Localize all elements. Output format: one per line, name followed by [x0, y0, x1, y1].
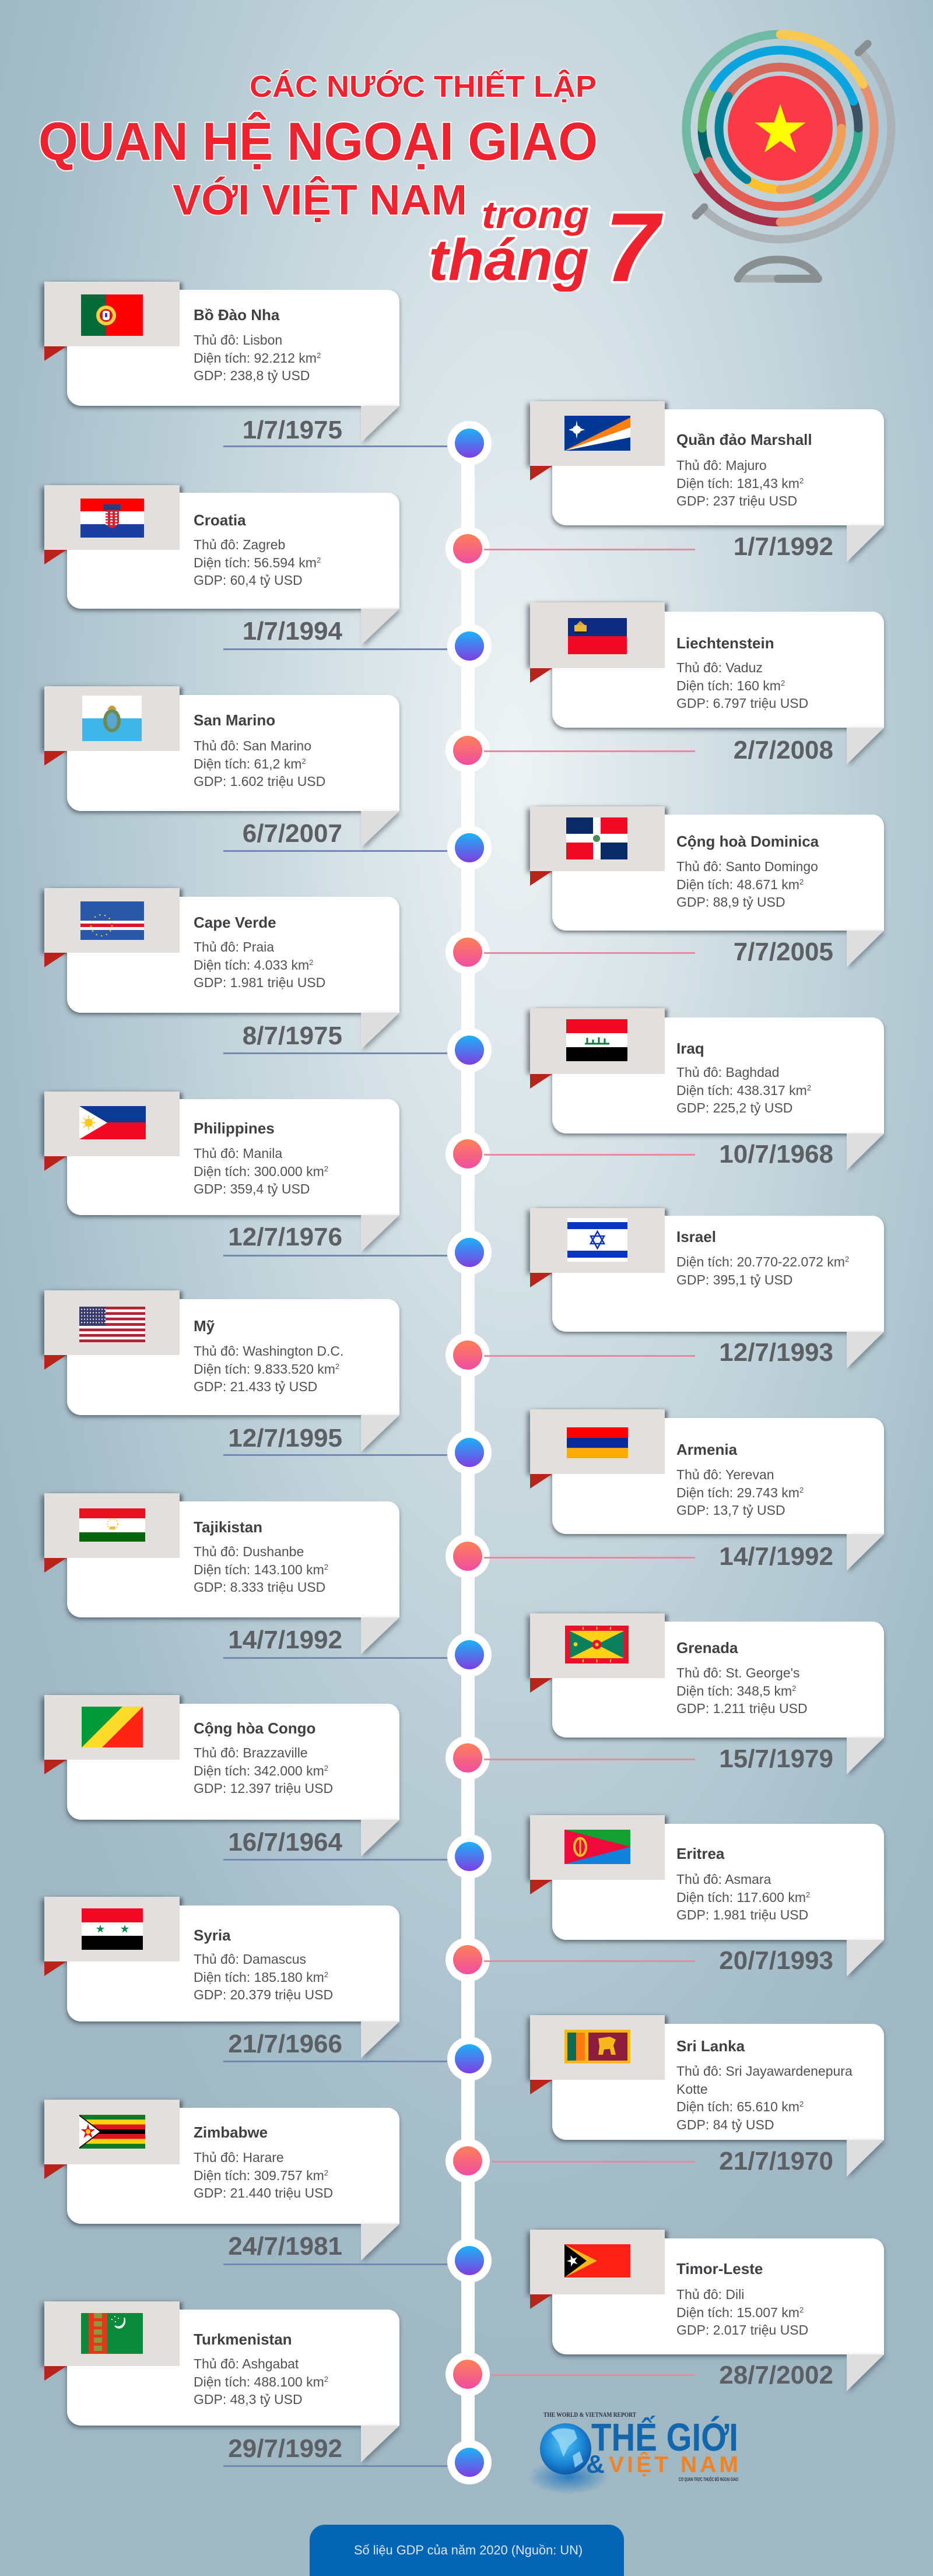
details: GDP: 238,8 tỷ USD — [194, 368, 310, 383]
details: Thủ đô: Lisbon — [194, 332, 282, 348]
flag: Armenia — [567, 1427, 628, 1458]
details: GDP: 88,9 tỷ USD — [676, 894, 785, 910]
details: GDP: 2.017 triệu USD — [676, 2322, 808, 2338]
connector — [492, 2374, 695, 2376]
logo: Thế Giới & Việt Nam: & — [586, 2450, 605, 2479]
details: Diện tích: 160 km2 — [676, 678, 785, 693]
dot: 21/7/1966 — [447, 2037, 492, 2081]
connector — [223, 2465, 447, 2467]
flag: Philippines — [79, 1106, 146, 1139]
date: 21/7/1966 — [228, 2030, 342, 2058]
dot: 15/7/1979 — [446, 1736, 490, 1780]
details: Diện tích: 309.757 km2 — [194, 2168, 328, 2183]
details: GDP: 1.981 triệu USD — [676, 1907, 808, 1922]
flag: San Marino — [82, 696, 142, 741]
card: Tajikistan — [38, 1491, 447, 1659]
details: GDP: 12.397 triệu USD — [194, 1781, 333, 1796]
country name: Tajikistan — [194, 1518, 262, 1536]
details: Thủ đô: Praia — [194, 939, 274, 954]
card: Eritrea — [482, 1815, 884, 1976]
country name: San Marino — [194, 711, 275, 729]
details: GDP: 1.602 triệu USD — [194, 774, 325, 789]
country name: Syria — [194, 1926, 231, 1944]
card: Bồ Đào Nha — [38, 280, 447, 447]
flag: Tajikistan — [79, 1508, 145, 1542]
connector — [223, 1657, 447, 1659]
details — [194, 1950, 333, 2003]
connector — [484, 1154, 695, 1156]
flag: United States — [79, 1307, 145, 1342]
country name: Zimbabwe — [194, 2124, 268, 2141]
country name: Turkmenistan — [194, 2331, 292, 2348]
flag: Sri Lanka — [564, 2030, 630, 2063]
flag: Israel — [567, 1218, 627, 1262]
details: Thủ đô: Majuro — [676, 458, 767, 473]
date: 7/7/2005 — [734, 938, 833, 966]
icon: globe with Vietnam flag — [682, 30, 896, 283]
connector — [492, 2161, 695, 2163]
flag: Syria — [82, 1908, 143, 1950]
card: Syria — [44, 1897, 447, 2062]
details: GDP: 8.333 triệu USD — [194, 1580, 325, 1595]
card: Iraq — [484, 1006, 887, 1172]
dot: 29/7/1992 — [447, 2440, 492, 2484]
flag: Croatia — [80, 499, 144, 538]
details — [194, 1342, 343, 1396]
flag: Grenada — [565, 1626, 629, 1663]
details — [194, 332, 321, 383]
connector — [223, 2263, 447, 2265]
card: Philippines — [38, 1089, 447, 1257]
country name: Iraq — [676, 1040, 704, 1057]
details — [676, 2286, 808, 2339]
date: 12/7/1976 — [228, 1223, 342, 1251]
details: Diện tích: 61,2 km2 — [194, 756, 306, 771]
flag: Liechtenstein — [568, 618, 627, 654]
country name: Grenada — [676, 1639, 738, 1656]
details: GDP: 359,4 tỷ USD — [194, 1181, 310, 1196]
card: Cộng hòa Congo — [44, 1695, 447, 1860]
header title: trong — [482, 193, 589, 236]
date: 14/7/1992 — [719, 1542, 833, 1571]
footer note — [310, 2525, 624, 2576]
country name: Bồ Đào Nha — [194, 306, 279, 324]
details — [676, 858, 818, 911]
details — [676, 659, 808, 713]
details: Thủ đô: Damascus — [194, 1952, 306, 1967]
details: GDP: 6.797 triệu USD — [676, 696, 808, 711]
details — [194, 537, 321, 588]
details: Diện tích: 117.600 km2 — [676, 1889, 810, 1904]
card: Croatia — [38, 483, 447, 650]
details: Thủ đô: Baghdad — [676, 1065, 779, 1080]
flag: Portugal — [81, 294, 143, 336]
connector — [223, 2061, 447, 2062]
card: Israel — [484, 1206, 887, 1370]
details: Thủ đô: Manila — [194, 1146, 282, 1161]
details: Kotte — [676, 2082, 708, 2097]
date: 6/7/2007 — [243, 819, 342, 848]
dot: 1/7/1994 — [447, 624, 492, 668]
details: Diện tích: 15.007 km2 — [676, 2304, 804, 2319]
details: GDP: 21.440 triệu USD — [194, 2185, 333, 2201]
dot: 24/7/1981 — [447, 2238, 492, 2283]
details: GDP: 237 triệu USD — [676, 493, 797, 508]
details: GDP: 20.379 triệu USD — [194, 1987, 333, 2002]
details: GDP: 48,3 tỷ USD — [194, 2392, 303, 2407]
header title: QUAN HỆ NGOẠI GIAO — [38, 111, 598, 171]
country name: Quần đảo Marshall — [676, 431, 812, 448]
flag: Dominican Republic — [566, 817, 627, 859]
flag: Iraq — [566, 1019, 627, 1061]
details: Thủ đô: Brazzaville — [194, 1745, 308, 1760]
header title: tháng — [429, 227, 589, 292]
country name: Timor-Leste — [676, 2260, 763, 2277]
card: Cộng hoà Dominica — [484, 805, 887, 969]
connector — [484, 750, 695, 752]
flag: Timor-Leste — [564, 2244, 630, 2277]
country name: Israel — [676, 1228, 716, 1245]
logo: Thế Giới & Việt Nam — [525, 2408, 746, 2496]
details: GDP: 60,4 tỷ USD — [194, 573, 303, 588]
connector — [223, 1454, 447, 1456]
details: Diện tích: 300.000 km2 — [194, 1164, 328, 1179]
dot: 10/7/1968 — [446, 1132, 490, 1176]
details: Diện tích: 56.594 km2 — [194, 555, 321, 570]
connector — [223, 648, 447, 650]
source text: Số liệu GDP của năm 2020 (Nguồn: UN) — [354, 2543, 583, 2557]
card: Mỹ — [38, 1289, 447, 1456]
details: GDP: 21.433 tỷ USD — [194, 1379, 317, 1394]
date: 20/7/1993 — [719, 1946, 833, 1975]
dot: 2/7/2008 — [446, 728, 490, 773]
details — [676, 1253, 849, 1289]
details: GDP: 84 tỷ USD — [676, 2117, 774, 2132]
flag: Marshall Islands — [564, 416, 630, 451]
header title — [38, 69, 665, 292]
card: Zimbabwe — [44, 2100, 447, 2265]
connector — [484, 549, 695, 550]
details: GDP: 225,2 tỷ USD — [676, 1100, 792, 1115]
dot: 8/7/1975 — [447, 1028, 492, 1072]
timeline spine with dots — [446, 421, 492, 2484]
card: Turkmenistan — [44, 2301, 447, 2466]
details: Thủ đô: St. George's — [676, 1665, 800, 1680]
details: Thủ đô: Dili — [676, 2287, 744, 2302]
date: 14/7/1992 — [228, 1626, 342, 1654]
country name: Eritrea — [676, 1845, 724, 1862]
details — [194, 938, 325, 991]
date: 21/7/1970 — [719, 2147, 833, 2175]
details — [676, 1466, 804, 1519]
connector — [223, 850, 447, 852]
country name: Sri Lanka — [676, 2037, 745, 2055]
details: Thủ đô: Santo Domingo — [676, 859, 818, 874]
header title: CÁC NƯỚC THIẾT LẬP — [250, 69, 597, 104]
details: GDP: 1.981 triệu USD — [194, 975, 325, 990]
dot: 12/7/1993 — [446, 1333, 490, 1377]
date: 10/7/1968 — [719, 1140, 833, 1168]
country name: Liechtenstein — [676, 634, 774, 652]
details: Thủ đô: Dushanbe — [194, 1544, 304, 1559]
details — [676, 1870, 810, 1924]
details: Thủ đô: Sri Jayawardenepura — [676, 2063, 853, 2079]
details — [676, 1064, 811, 1117]
card: Cape Verde — [38, 886, 447, 1054]
dot: 12/7/1976 — [447, 1230, 492, 1275]
connector — [223, 445, 447, 447]
card: Sri Lanka — [482, 2015, 884, 2177]
details: Diện tích: 20.770-22.072 km2 — [676, 1254, 849, 1269]
connector — [223, 1859, 447, 1861]
card: Timor-Leste — [482, 2230, 884, 2391]
details: Thủ đô: Vaduz — [676, 660, 763, 675]
details: Thủ đô: Harare — [194, 2150, 284, 2165]
details: Diện tích: 9.833.520 km2 — [194, 1361, 339, 1376]
card: Armenia — [484, 1408, 886, 1573]
card: San Marino — [38, 685, 447, 852]
details: Diện tích: 65.610 km2 — [676, 2099, 804, 2114]
connector — [484, 1759, 695, 1760]
details: Diện tích: 29.743 km2 — [676, 1484, 804, 1500]
dot: 1/7/1992 — [446, 527, 490, 571]
details: GDP: 395,1 tỷ USD — [676, 1272, 792, 1287]
details: Diện tích: 185.180 km2 — [194, 1970, 328, 1985]
date: 12/7/1995 — [228, 1424, 342, 1452]
details: GDP: 13,7 tỷ USD — [676, 1503, 785, 1518]
details — [676, 458, 804, 508]
details: Diện tích: 92.212 km2 — [194, 350, 321, 365]
details: Thủ đô: Asmara — [676, 1872, 771, 1887]
date: 12/7/1993 — [719, 1338, 833, 1367]
details: Diện tích: 348,5 km2 — [676, 1683, 796, 1698]
dot: 14/7/1992 left — [447, 1633, 492, 1677]
date: 24/7/1981 — [228, 2232, 342, 2261]
dot: 6/7/2007 — [447, 826, 492, 870]
connector — [223, 1255, 447, 1257]
date: 2/7/2008 — [734, 736, 833, 764]
dot: 28/7/2002 — [446, 2352, 490, 2396]
details — [194, 1744, 333, 1797]
details — [194, 737, 325, 791]
details — [194, 1543, 328, 1596]
card: Grenada — [484, 1612, 886, 1776]
connector — [484, 1960, 695, 1962]
country name: Croatia — [194, 511, 246, 529]
date: 8/7/1975 — [243, 1022, 342, 1050]
details: Diện tích: 488.100 km2 — [194, 2374, 328, 2389]
country name: Cộng hoà Dominica — [676, 833, 819, 850]
dot: 7/7/2005 — [446, 930, 490, 974]
details: Diện tích: 181,43 km2 — [676, 476, 804, 491]
connector — [484, 1355, 695, 1357]
card: Liechtenstein — [484, 601, 887, 766]
date: 1/7/1992 — [734, 532, 833, 561]
details: Diện tích: 143.100 km2 — [194, 1561, 328, 1577]
date: 29/7/1992 — [228, 2434, 342, 2463]
header title: VỚI VIỆT NAM — [173, 177, 467, 224]
connector — [484, 1557, 695, 1559]
details: Diện tích: 48.671 km2 — [676, 877, 804, 892]
details: Thủ đô: Yerevan — [676, 1467, 774, 1482]
dot: 1/7/1975 — [447, 421, 492, 465]
logo: Thế Giới & Việt Nam: VIỆT NAM — [609, 2452, 738, 2477]
details — [194, 1145, 328, 1198]
date: 15/7/1979 — [719, 1745, 833, 1773]
country name: Cape Verde — [194, 914, 276, 931]
dot: 16/7/1964 — [447, 1834, 492, 1879]
card: Quần đảo Marshall — [484, 399, 887, 564]
flag: Turkmenistan — [81, 2313, 143, 2354]
flag: Cape Verde — [80, 901, 144, 940]
logo: Thế Giới & Việt Nam: THE WORLD & VIETNAM REPORT — [543, 2410, 636, 2419]
country name: Mỹ — [194, 1317, 215, 1335]
details: Diện tích: 438.317 km2 — [676, 1082, 811, 1097]
dot: 14/7/1992 — [446, 1534, 490, 1578]
flag: Republic of the Congo — [82, 1707, 143, 1747]
details: Diện tích: 4.033 km2 — [194, 957, 313, 973]
country name: Armenia — [676, 1441, 737, 1458]
connector — [223, 1052, 447, 1054]
date: 1/7/1994 — [243, 617, 342, 645]
country name: Philippines — [194, 1119, 275, 1137]
details — [194, 2149, 333, 2202]
details — [676, 1664, 808, 1718]
details — [194, 2355, 328, 2408]
details: Thủ đô: Ashgabat — [194, 2356, 299, 2371]
date: 28/7/2002 — [719, 2361, 833, 2389]
flag: Zimbabwe — [79, 2115, 145, 2149]
connector — [484, 952, 695, 954]
flag: Eritrea — [564, 1830, 630, 1864]
dot: 21/7/1970 — [446, 2139, 490, 2183]
dot: 20/7/1993 — [446, 1938, 490, 1982]
details — [676, 2062, 853, 2133]
details: Thủ đô: San Marino — [194, 738, 311, 753]
details: Thủ đô: Zagreb — [194, 537, 285, 552]
details: Thủ đô: Washington D.C. — [194, 1343, 343, 1359]
country name: Cộng hòa Congo — [194, 1719, 315, 1737]
details: GDP: 1.211 triệu USD — [676, 1701, 808, 1716]
date: 16/7/1964 — [228, 1828, 342, 1856]
dot: 12/7/1995 — [447, 1430, 492, 1475]
details: Diện tích: 342.000 km2 — [194, 1763, 328, 1778]
date: 1/7/1975 — [243, 416, 342, 444]
